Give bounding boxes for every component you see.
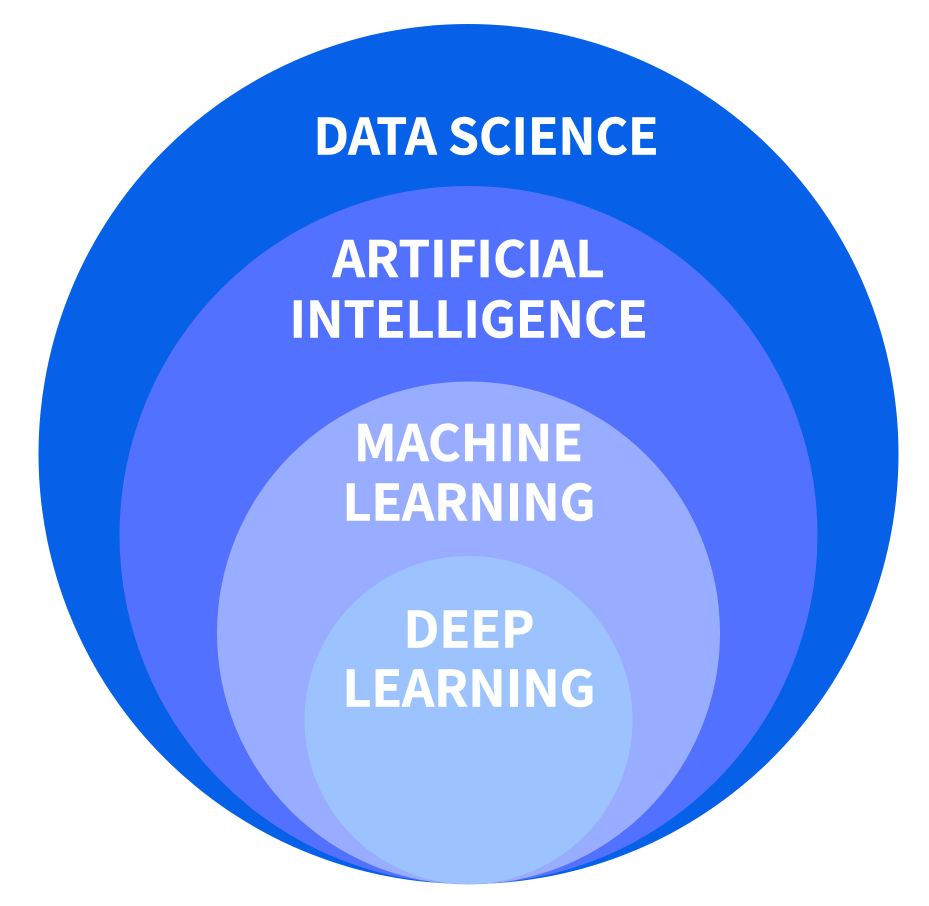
label: artificial intelligence: ARTIFICIAL (331, 220, 604, 292)
label: machine learning: LEARNING (342, 464, 596, 536)
label: machine learning: MACHINE (354, 404, 583, 476)
label: deep learning: DEEP (404, 590, 534, 662)
label: artificial intelligence: INTELLIGENCE (290, 280, 648, 352)
label: machine learning (342, 404, 596, 536)
circle: deep learning (304, 556, 632, 884)
circle: artificial intelligence (120, 186, 818, 884)
circle: machine learning (217, 382, 720, 884)
label: artificial intelligence (290, 220, 648, 352)
label: deep learning (342, 590, 596, 722)
label: data science: DATA SCIENCE (314, 98, 658, 170)
label: deep learning: LEARNING (342, 650, 596, 722)
